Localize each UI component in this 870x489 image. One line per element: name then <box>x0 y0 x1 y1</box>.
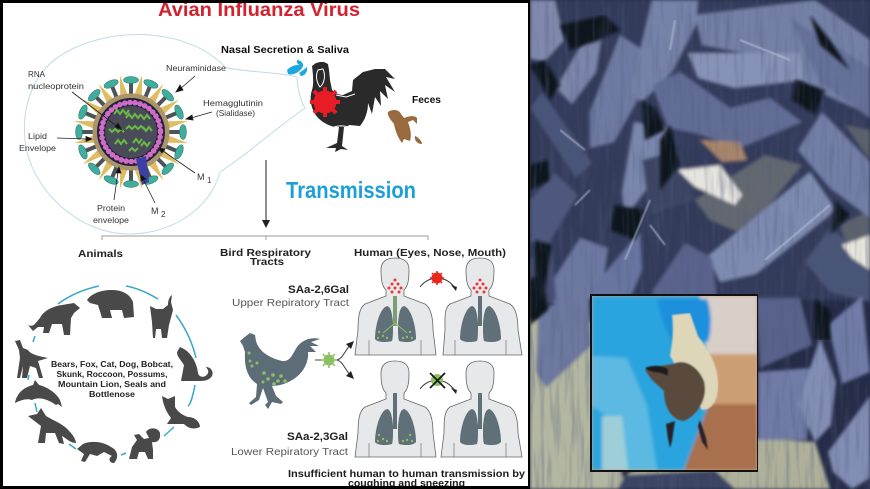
arrow: blocked green virus <box>420 373 457 394</box>
panel: dead birds photo <box>530 0 870 489</box>
branch connector <box>102 236 428 240</box>
virus pointer arrows <box>57 76 212 203</box>
inset photo: gloved hand holding bird <box>590 294 758 472</box>
respiratory tract labels <box>231 284 349 458</box>
label: feces: Feces <box>412 94 441 106</box>
virus labels: RNA <box>28 69 45 79</box>
respiratory tract labels: Lower Repiratory Tract <box>231 446 348 458</box>
virus labels: Hemagglutinin <box>203 98 263 108</box>
virus labels: 1 <box>207 176 212 185</box>
branch labels: Tracts <box>250 256 284 268</box>
branch labels <box>78 248 506 265</box>
bubble outline <box>24 35 305 234</box>
virus labels: Protein <box>97 203 125 213</box>
virus labels: envelope <box>93 215 129 225</box>
branch labels: Bird Respiratory <box>220 247 311 259</box>
feather texture <box>530 0 870 489</box>
animal list text: Bottlenose <box>89 390 136 399</box>
person: upper right infected <box>443 258 522 355</box>
virus labels: 2 <box>161 210 166 219</box>
virus labels <box>19 63 263 225</box>
conclusion text <box>288 470 525 486</box>
branch labels: Human (Eyes, Nose, Mouth) <box>354 247 506 259</box>
animal ring <box>28 286 196 455</box>
label: nasal secretion: Nasal Secretion & Saliva <box>221 44 349 56</box>
icon: green virus and split arrows <box>315 341 354 379</box>
person: lower right healthy <box>441 361 522 457</box>
person: lower left infected <box>355 361 436 457</box>
animal list text: Mountain Lion, Seals and <box>58 380 166 389</box>
icon: rooster <box>311 62 395 152</box>
virus labels: nucleoprotein <box>28 81 84 91</box>
animal list text <box>51 360 173 399</box>
person: upper left infected <box>355 258 436 355</box>
respiratory tract labels: SAa-2,3Gal <box>287 431 348 443</box>
animal list text: Bears, Fox, Cat, Dog, Bobcat, <box>51 360 173 369</box>
animal list text: Skunk, Roccoon, Possums, <box>56 370 168 379</box>
virus labels: M <box>151 206 158 216</box>
virus diagram <box>73 74 189 190</box>
icon: droplets <box>287 60 307 76</box>
virus labels: M <box>197 172 204 182</box>
panel: infographic <box>3 0 528 489</box>
heading: transmission: Transmission <box>286 177 416 203</box>
arrow: down to branches <box>262 160 270 228</box>
virus labels: Neuraminidase <box>166 63 226 73</box>
arrow: red virus transmission <box>420 271 457 291</box>
respiratory tract labels: SAa-2,6Gal <box>288 284 349 296</box>
virus labels: Envelope <box>19 143 56 153</box>
respiratory tract labels: Upper Repiratory Tract <box>232 297 349 309</box>
icon: red virus on rooster <box>310 87 340 117</box>
branch labels: Animals <box>78 248 123 260</box>
animal silhouettes <box>15 290 213 463</box>
virus labels: (Sialidase) <box>216 108 255 118</box>
title: Avian Influanza Virus <box>158 0 360 21</box>
icon: feces <box>388 110 422 144</box>
icon: grey chicken <box>240 333 320 409</box>
virus labels: Lipid <box>28 131 47 141</box>
conclusion text: Insufficient human to human transmission by <box>288 468 525 480</box>
